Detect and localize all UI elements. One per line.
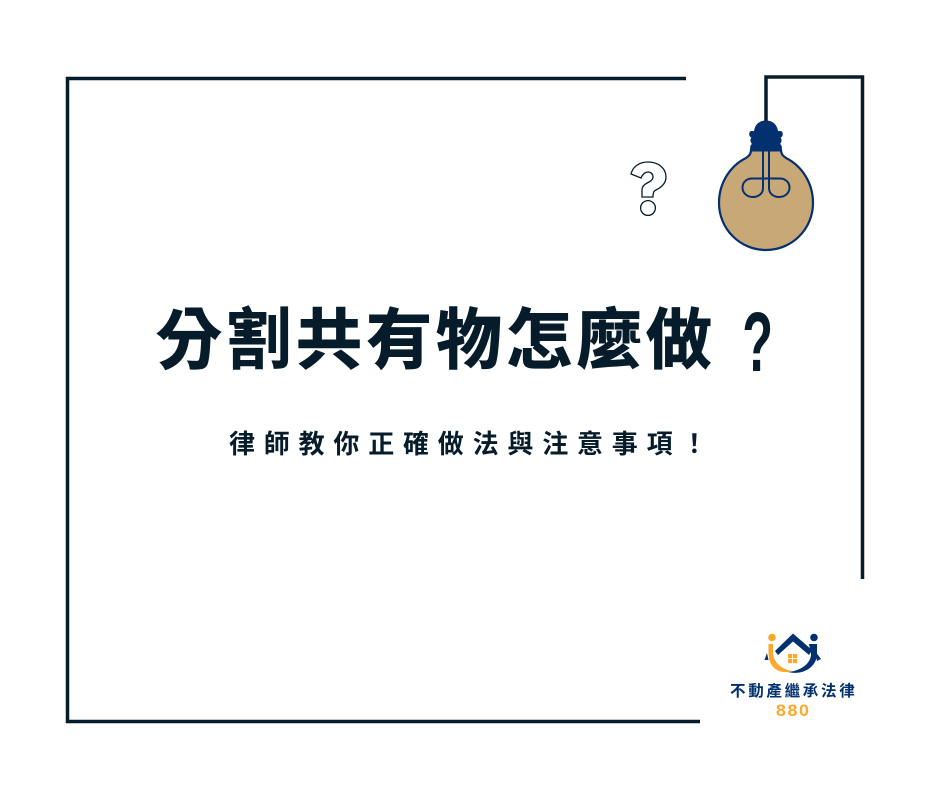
bulb screw cap bbox=[749, 120, 783, 152]
filament bbox=[742, 150, 790, 197]
logo number: 880 bbox=[776, 702, 811, 720]
logo: property inheritance law 880 bbox=[730, 634, 857, 720]
bulb glass bbox=[719, 150, 813, 250]
icon: question mark bbox=[630, 161, 667, 216]
icon: house with two people bbox=[764, 634, 821, 673]
logo name: 不動產繼承法律 bbox=[730, 683, 857, 700]
subtitle: 律師教你正確做法與注意事項！ bbox=[229, 429, 716, 459]
title: 分割共有物怎麼做 bbox=[156, 303, 716, 377]
icon: light bulb bbox=[718, 120, 814, 252]
text: ? bbox=[742, 295, 773, 389]
